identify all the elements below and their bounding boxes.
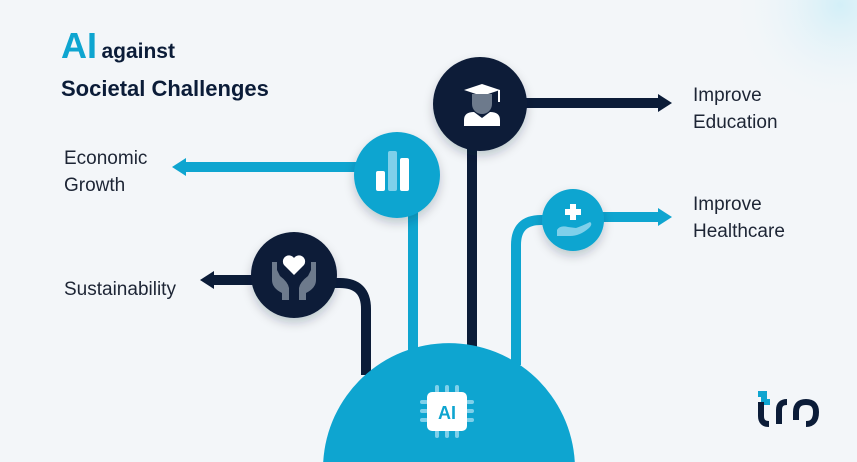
title: Societal Challenges bbox=[61, 76, 269, 101]
label: economic growth: Growth bbox=[64, 175, 125, 196]
label: economic growth bbox=[64, 148, 147, 196]
connector: healthcare bbox=[516, 208, 672, 365]
icon: bar chart bbox=[376, 151, 409, 191]
label: improve healthcare bbox=[693, 194, 785, 242]
icon: hands heart bbox=[272, 255, 316, 300]
AI hub circle bbox=[323, 343, 575, 462]
connector: education bbox=[472, 94, 672, 360]
connector: economic bbox=[172, 158, 413, 360]
node: healthcare bbox=[542, 189, 604, 251]
label: improve healthcare: Healthcare bbox=[693, 221, 785, 242]
icon: graduate bbox=[464, 84, 500, 126]
icon: medical hand bbox=[557, 204, 591, 236]
node: sustainability bbox=[251, 232, 337, 318]
node: education bbox=[433, 57, 527, 151]
label: sustainability: Sustainability bbox=[64, 279, 176, 300]
label: economic growth: Economic bbox=[64, 148, 147, 169]
icon: AI chip bbox=[420, 385, 474, 438]
connector: sustainability bbox=[200, 271, 366, 375]
label: improve healthcare: Improve bbox=[693, 194, 762, 215]
node: economic bbox=[354, 132, 440, 218]
icon: AI chip: AI bbox=[438, 403, 456, 423]
label: improve education bbox=[693, 85, 778, 133]
label: improve education: Improve bbox=[693, 85, 762, 106]
label: improve education: Education bbox=[693, 112, 778, 133]
title: AI against bbox=[61, 25, 175, 66]
title bbox=[61, 25, 269, 101]
logo bbox=[758, 394, 816, 424]
